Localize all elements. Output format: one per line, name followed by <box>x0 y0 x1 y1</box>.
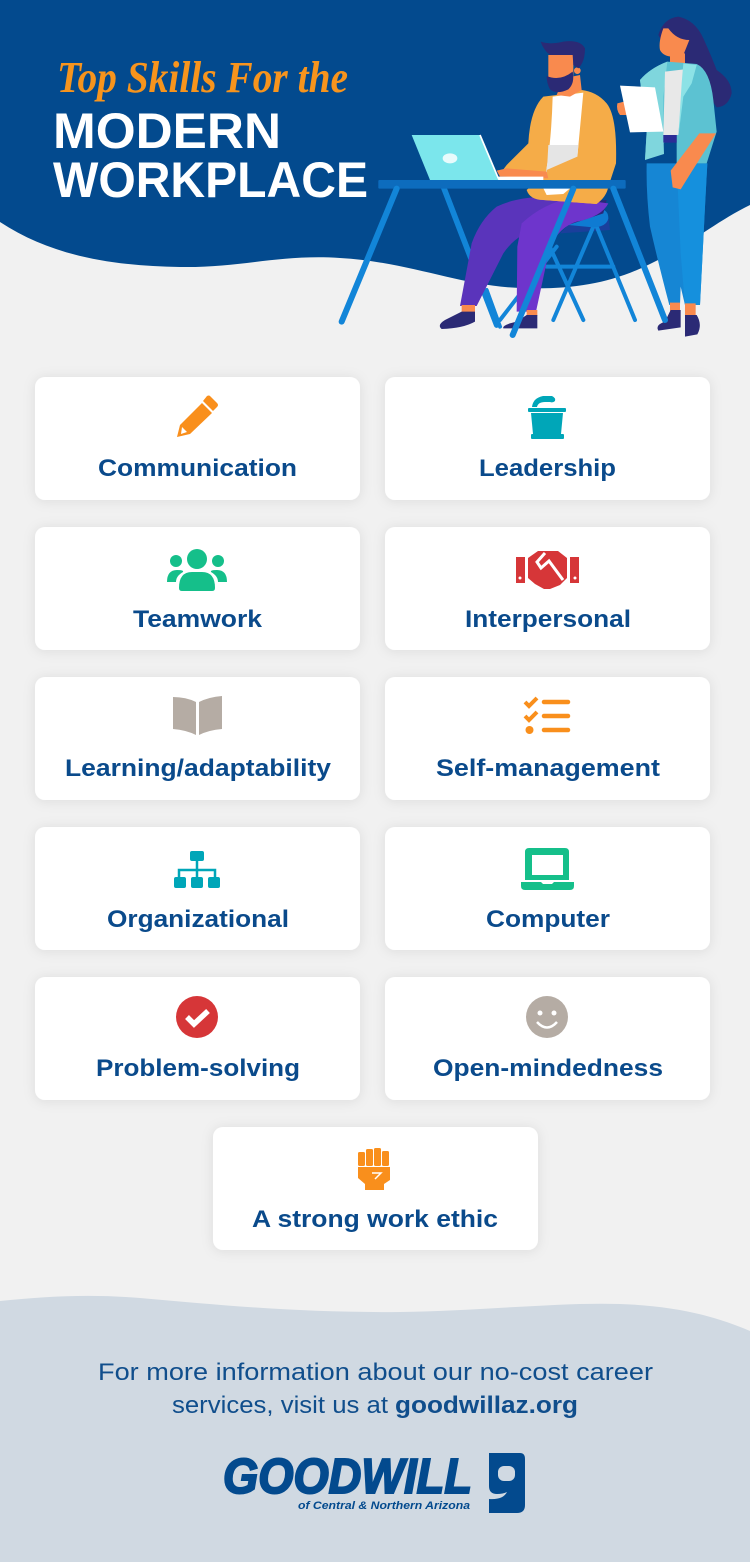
desk back leg <box>443 187 497 325</box>
icon: handshake <box>516 551 579 589</box>
footer text: goodwillaz.org <box>395 1392 578 1419</box>
card: open-mindedness <box>385 977 710 1100</box>
icon: checklist <box>525 698 568 734</box>
card: interpersonal <box>385 527 710 650</box>
card: leadership <box>385 377 710 500</box>
footer text <box>98 1359 653 1419</box>
label: Open-mindedness <box>433 1055 663 1082</box>
header wave background <box>0 0 750 288</box>
icon: book <box>173 696 222 735</box>
label: Problem-solving <box>96 1055 300 1082</box>
footer band <box>0 1296 750 1562</box>
icon: fist <box>358 1148 390 1190</box>
title <box>53 53 368 208</box>
footer text: services, visit us at <box>172 1392 388 1419</box>
card: computer <box>385 827 710 950</box>
label: Self-management <box>436 755 660 782</box>
card: problem-solving <box>35 977 360 1100</box>
title line: modern: MODERN <box>53 103 281 159</box>
card: a strong work ethic <box>213 1127 538 1250</box>
title script line: Top Skills For the <box>57 53 348 102</box>
logo g mark <box>489 1453 525 1513</box>
label: Leadership <box>479 455 616 482</box>
icon: laptop <box>521 848 574 890</box>
laptop <box>412 135 543 180</box>
icon: podium <box>528 396 566 439</box>
label: Computer <box>486 906 610 933</box>
logo wordmark: GOODWILL <box>223 1450 472 1504</box>
goodwill logo <box>223 1450 525 1513</box>
label: Communication <box>98 455 297 482</box>
illustration: two people at a desk <box>342 17 732 337</box>
icon: smiley <box>526 996 568 1038</box>
icon: org chart <box>174 851 220 888</box>
icon: team <box>167 549 227 591</box>
card: teamwork <box>35 527 360 650</box>
card: communication <box>35 377 360 500</box>
title line: workplace: WORKPLACE <box>53 152 368 208</box>
footer text: For more information about our no-cost career <box>98 1359 653 1386</box>
desk <box>342 180 665 335</box>
card: organizational <box>35 827 360 950</box>
label: A strong work ethic <box>252 1206 498 1233</box>
label: Teamwork <box>133 606 263 633</box>
stool <box>487 208 635 327</box>
icon: pencil <box>177 396 218 437</box>
woman <box>617 17 732 337</box>
label: Learning/adaptability <box>65 755 332 782</box>
card: self-management <box>385 677 710 800</box>
card: learning/adaptability <box>35 677 360 800</box>
logo tagline: of Central & Northern Arizona <box>298 1500 470 1512</box>
label: Organizational <box>107 906 289 933</box>
man <box>440 41 616 329</box>
label: Interpersonal <box>465 606 631 633</box>
icon: check circle <box>176 996 218 1038</box>
